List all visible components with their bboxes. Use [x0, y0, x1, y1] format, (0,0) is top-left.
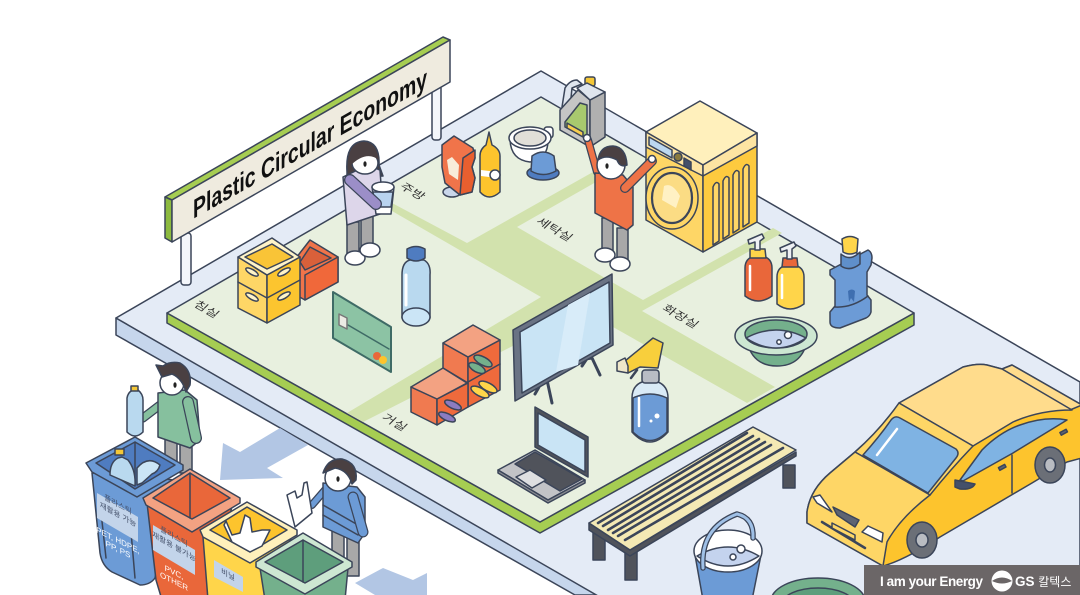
kitchen: coffee capsule — [527, 152, 559, 180]
man reaching up — [584, 134, 656, 271]
blue bin resin codes: PET, HDPE, — [96, 525, 140, 556]
yellow crates — [238, 238, 300, 323]
yellow bin text: 비닐 — [221, 566, 235, 583]
arrow: down-right — [355, 568, 427, 595]
yellow pump bottle — [777, 242, 804, 309]
GS Caltex name: GS 칼텍스 — [1015, 574, 1071, 589]
laptop — [498, 407, 588, 503]
room label: living room: 거실 — [379, 412, 410, 433]
mouthwash bottle — [830, 236, 872, 328]
sign title: Plastic Circular Economy — [193, 64, 427, 226]
room label: bathroom: 화장실 — [660, 303, 701, 331]
spray bottle — [617, 338, 668, 442]
TV on stand — [513, 274, 613, 403]
orange bin label — [153, 525, 195, 575]
green basin at bottom — [771, 578, 865, 595]
yellow car — [807, 364, 1080, 566]
room label: laundry: 세탁실 — [534, 216, 575, 244]
blue recycling bin — [86, 437, 183, 585]
platform base — [116, 71, 1080, 595]
bench — [589, 427, 796, 580]
green recycling bin — [256, 533, 352, 595]
orange bin resin codes: OTHER — [160, 569, 188, 593]
person in green — [127, 362, 200, 473]
orange recycling bin — [143, 469, 240, 595]
bucket — [694, 514, 762, 595]
yellow recycling bin — [200, 502, 297, 595]
tagline: I am your Energy — [880, 574, 983, 589]
shoe shelf — [411, 325, 500, 425]
orange bin text: 플라스틱 — [160, 524, 188, 549]
blue bin text: 플라스틱 — [104, 492, 132, 516]
washing machine — [646, 101, 757, 252]
blue bin label — [97, 493, 138, 542]
kitchen: bowl mug — [509, 127, 553, 162]
sign board — [165, 37, 450, 285]
brand footer bar — [864, 565, 1080, 595]
credit card — [333, 292, 391, 372]
orange pump bottle — [745, 234, 772, 301]
yellow bin label — [214, 560, 243, 592]
floor — [167, 97, 914, 533]
orange bin resin codes: PVC, — [165, 563, 183, 582]
woman with cup — [343, 141, 394, 265]
room label: kitchen: 주방 — [397, 181, 428, 203]
arrow: down-left — [220, 428, 308, 480]
GS logo mark — [992, 570, 1012, 592]
kitchen: mustard bottle — [480, 132, 500, 197]
kitchen: ketchup bottle — [442, 136, 475, 197]
water bottle — [402, 246, 430, 326]
blue bin text: 재활용 가능 — [100, 500, 136, 529]
person in blue — [287, 459, 365, 576]
detergent jug — [560, 77, 605, 147]
green basin — [735, 317, 817, 366]
room label: bedroom: 침실 — [191, 299, 222, 320]
orange bin text: 재활용 불가능 — [152, 529, 196, 564]
orange crate — [296, 240, 338, 300]
blue bin resin codes: PP, PS — [106, 538, 131, 560]
